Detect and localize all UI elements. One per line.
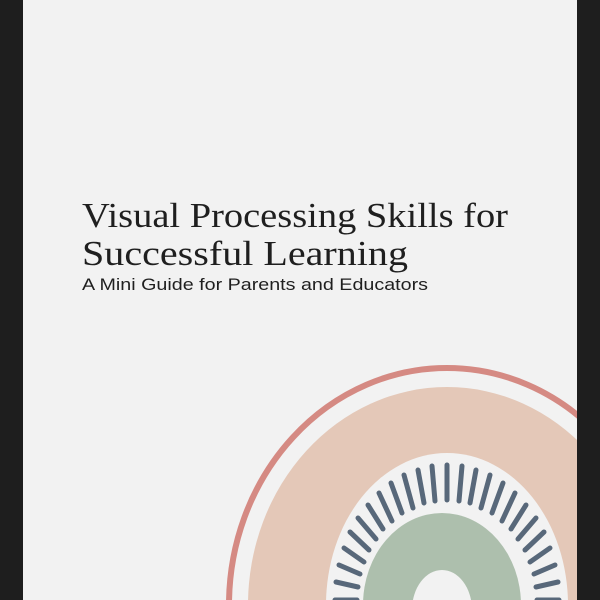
rainbow illustration	[229, 368, 600, 600]
arch: green band	[363, 513, 521, 600]
rays	[335, 465, 559, 600]
arch: red outline	[229, 368, 600, 600]
title	[82, 196, 508, 273]
arch: peach band	[248, 387, 600, 600]
subtitle: A Mini Guide for Parents and Educators	[82, 275, 428, 294]
title: Visual Processing Skills for	[82, 196, 508, 235]
title: Successful Learning	[82, 234, 408, 273]
